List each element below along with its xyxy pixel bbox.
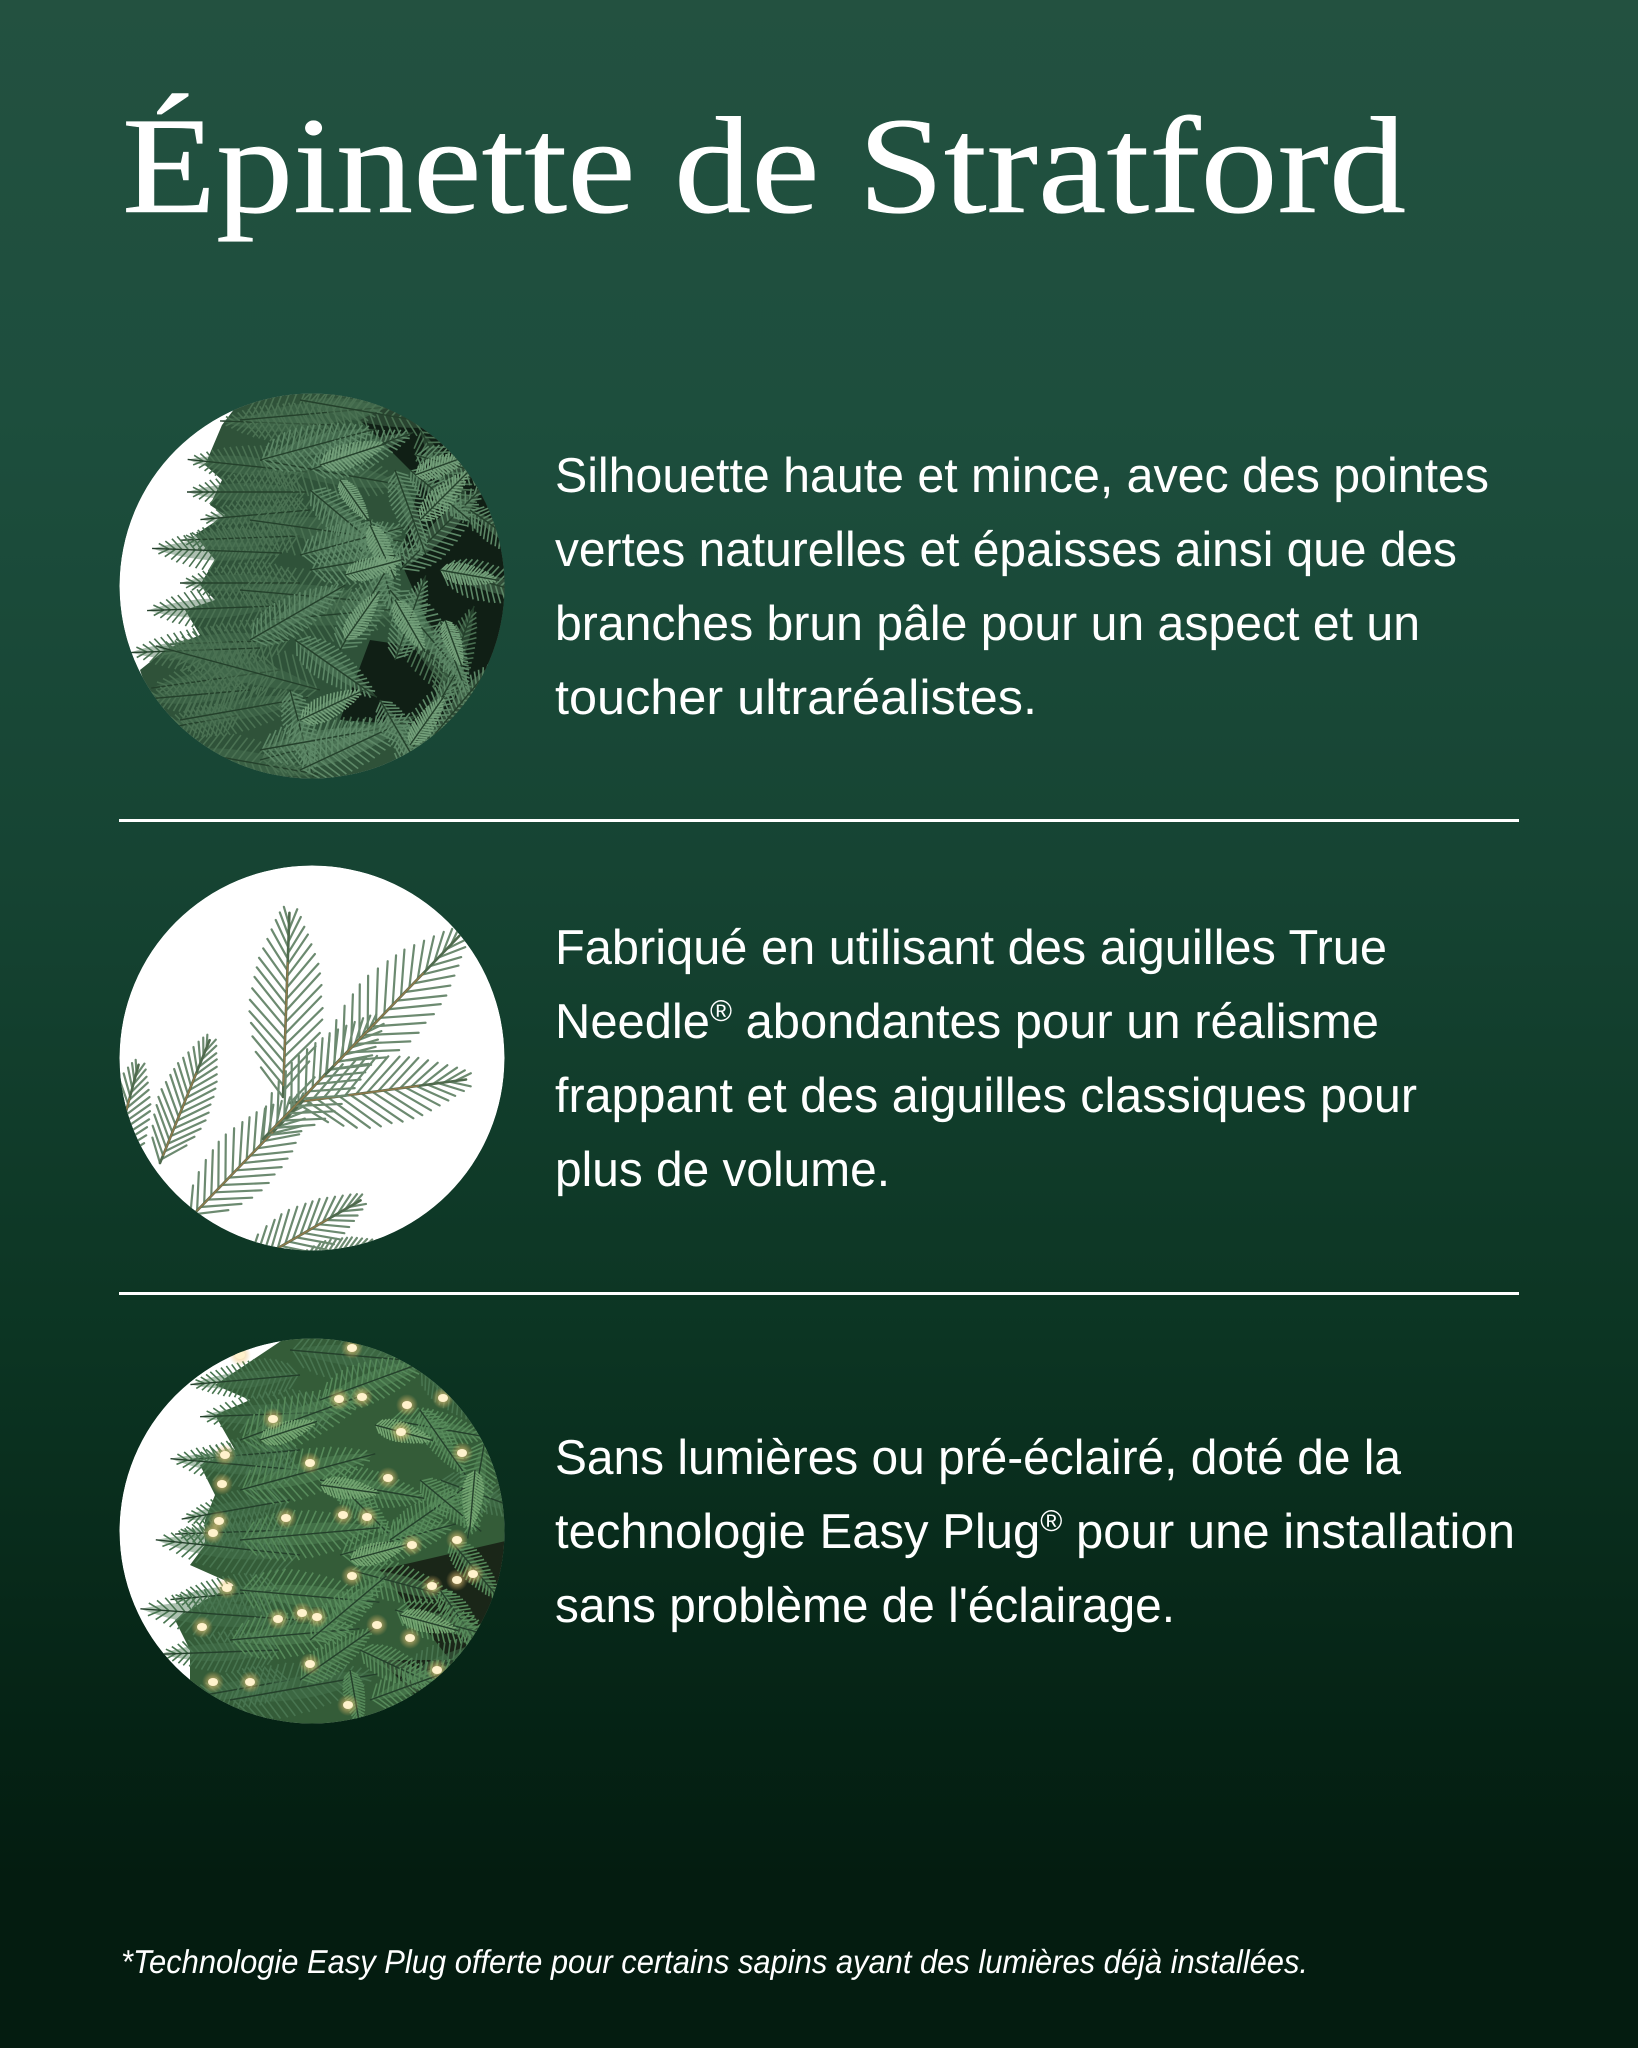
footnote: *Technologie Easy Plug offerte pour certains sapins ayant des lumières déjà installées. bbox=[121, 1943, 1308, 1980]
text block: needles: frappant et des aiguilles classiques pour bbox=[555, 1069, 1417, 1123]
text block: lighting: technologie Easy Plug bbox=[555, 1505, 1040, 1559]
text block: needles: plus de volume. bbox=[555, 1143, 890, 1197]
text block: lighting: ® bbox=[1040, 1505, 1062, 1538]
text block: needles: abondantes pour un réalisme bbox=[732, 995, 1379, 1049]
text block: silhouette: branches brun pâle pour un aspect et un bbox=[555, 597, 1420, 651]
text block: silhouette: toucher ultraréalistes. bbox=[555, 671, 1037, 725]
title: Épinette de Stratford bbox=[122, 89, 1406, 242]
text block: lighting: pour une installation bbox=[1062, 1505, 1515, 1559]
text block: needles: Needle bbox=[555, 995, 710, 1049]
text block: needles bbox=[555, 921, 1417, 1197]
text block: silhouette: vertes naturelles et épaisses ainsi que des bbox=[555, 523, 1457, 577]
photo circle: single fir branch bbox=[120, 866, 504, 1250]
text block: lighting bbox=[555, 1431, 1515, 1633]
text block: silhouette bbox=[555, 449, 1489, 725]
text block: lighting: sans problème de l'éclairage. bbox=[555, 1579, 1175, 1633]
text block: lighting: Sans lumières ou pré-éclairé, doté de la bbox=[555, 1431, 1402, 1485]
photo circle: dense fir foliage bbox=[120, 394, 504, 778]
divider bbox=[119, 819, 1519, 822]
divider bbox=[119, 1292, 1519, 1295]
text block: needles: Fabriqué en utilisant des aiguilles True bbox=[555, 921, 1387, 975]
photo circle: pre-lit fir bbox=[120, 1338, 504, 1724]
text block: silhouette: Silhouette haute et mince, avec des pointes bbox=[555, 449, 1489, 503]
text block: needles: ® bbox=[710, 995, 732, 1028]
